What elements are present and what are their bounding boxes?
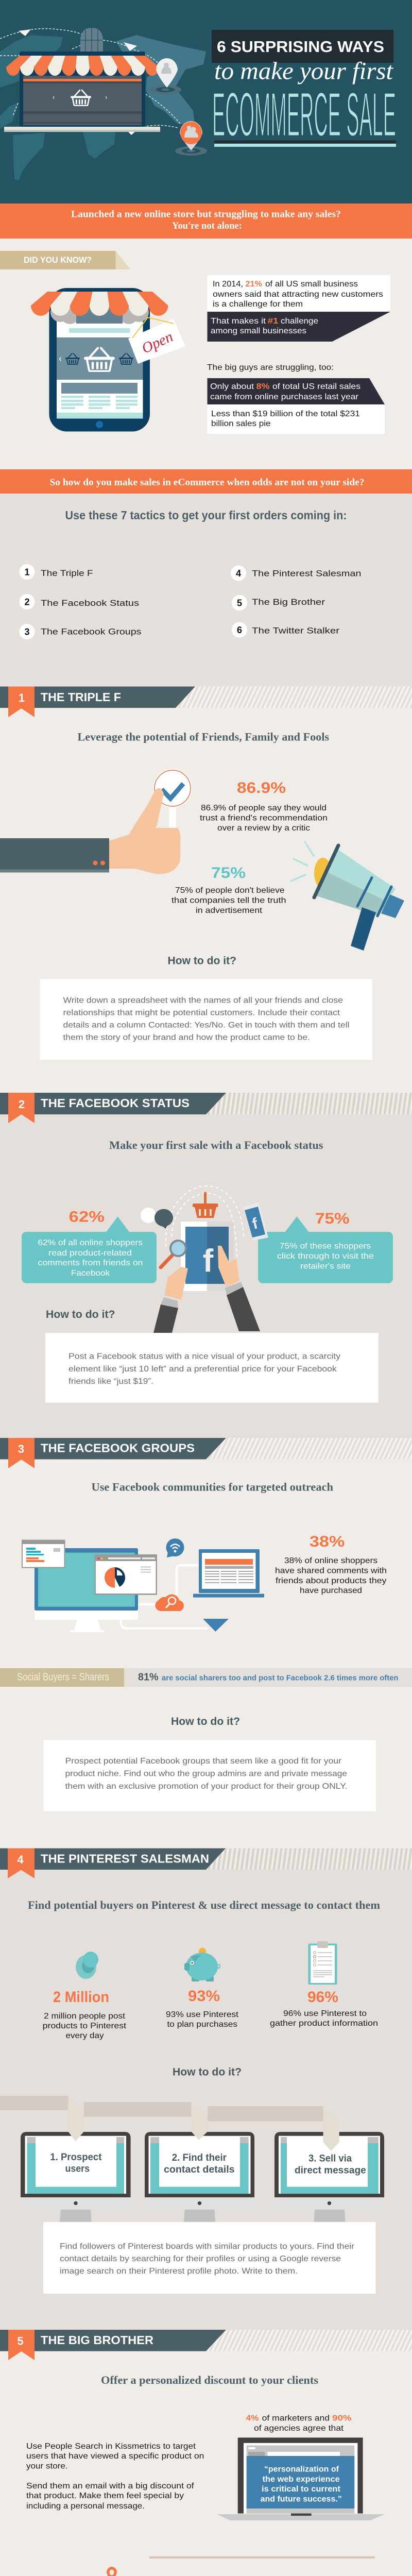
section banner 1 <box>0 686 412 717</box>
monitor step 3: 3. Sell via <box>308 2154 352 2164</box>
stat: 38%: have shared comments with <box>275 1567 387 1575</box>
stat: 38%: friends about products they <box>276 1577 386 1585</box>
how to do it heading 3: How to do it? <box>171 1716 240 1727</box>
open sign <box>128 317 185 364</box>
laptop quote: “personalization of <box>264 2465 339 2474</box>
section banner 2: 2 <box>19 1098 25 1111</box>
facebook tablet illustration <box>141 1186 268 1333</box>
intro banner: Launched a new online store but struggling to make any sales? <box>71 209 341 219</box>
stat panel: big guys struggling: 8% <box>256 382 270 391</box>
how to panel 3: them with an exclusive promotion of your product for their group ONLY. <box>65 1782 347 1791</box>
question banner: So how do you make sales in eCommerce when odds are not on your side? <box>49 477 365 488</box>
how to panel 1: them the story of your brand and how the product came to be. <box>63 1033 310 1042</box>
section banner 4: 4 <box>17 1853 24 1866</box>
social buyers band: are social sharers too and post to Facebook 2.6 times more often <box>162 1673 399 1682</box>
monitor step 2: contact details <box>164 2164 235 2175</box>
stat: marketers and agencies: 4% <box>246 2414 259 2423</box>
stat: 96%: 96% <box>307 1989 338 2006</box>
tactics list: The Triple F <box>41 568 93 578</box>
tactics heading: Use these 7 tactics to get your first orders coming in: <box>65 509 347 522</box>
heading: triple f: Leverage the potential of Friends, Family and Fools <box>77 731 329 743</box>
stat panel: big guys struggling: Only about <box>210 382 254 391</box>
callout: 75%: 75% <box>315 1210 350 1227</box>
stat: 2 million: 2 Million <box>53 1989 109 2006</box>
monitor step 2 <box>145 2132 254 2222</box>
tactics list: The Twitter Stalker <box>252 626 339 636</box>
stat: 2 million: every day <box>66 2031 104 2040</box>
icon: clipboard <box>308 1941 337 1985</box>
stat: marketers and agencies: 90% <box>332 2414 352 2423</box>
how to do it heading 4: How to do it? <box>173 2066 242 2078</box>
how to do it heading 2: How to do it? <box>46 1309 115 1320</box>
how to panel 1 <box>40 979 372 1060</box>
how to panel 2: friends like “just $19”. <box>68 1377 153 1386</box>
stat: 93%: to plan purchases <box>167 2020 237 2029</box>
tactics list: 1 <box>24 567 30 577</box>
stat: 75%: 75% <box>211 865 246 882</box>
stat: 75%: in advertisement <box>196 906 263 915</box>
big brother text <box>26 2442 204 2511</box>
laptop quote: is critical to current <box>262 2485 341 2494</box>
stat panel: big guys struggling: The big guys are struggling, too: <box>207 363 334 372</box>
tactics list: 5 <box>237 598 242 608</box>
callout: 62%: read product-related <box>48 1249 132 1258</box>
callout: 62% <box>22 1208 157 1283</box>
section banner 2 <box>0 1093 412 1123</box>
hero illustration: laptop storefront: ‹ <box>53 93 55 101</box>
stat: 38%: 38% <box>310 1533 345 1550</box>
how to panel 3: product niche. Find out who the group admins are and private message <box>65 1769 347 1778</box>
how to panel 3 <box>44 1740 376 1811</box>
stat: 2 million <box>43 1989 127 2040</box>
callout: 75%: retailer's site <box>300 1262 351 1270</box>
hero illustration: world map <box>0 35 206 180</box>
hero illustration: cage dome <box>80 28 103 52</box>
callout: 62%: 62% <box>69 1208 105 1225</box>
how to panel 2 <box>45 1333 379 1402</box>
section banner 2: THE FACEBOOK STATUS <box>41 1096 190 1110</box>
monitor step 2: 2. Find their <box>172 2153 227 2163</box>
stat panel: small business challenge: owners said that attracting new customers <box>213 290 383 299</box>
big brother text: including a personal message. <box>26 2502 145 2511</box>
callout: 62%: comments from friends on <box>38 1259 143 1267</box>
stat panel: big guys struggling: came from online purchases last year <box>210 393 359 401</box>
laptop quote: and future success.” <box>261 2495 342 2503</box>
stat: 86.9%: trust a friend's recommendation <box>200 814 328 822</box>
stat panel: small business challenge: is a challenge for them <box>213 300 303 309</box>
callout: 62%: 62% of all online shoppers <box>38 1239 143 1247</box>
social buyers band <box>0 1668 412 1687</box>
how to panel 2: Post a Facebook status with a nice visual of your product, a scarcity <box>68 1352 340 1361</box>
heading: pinterest: Find potential buyers on Pinterest & use direct message to contact them <box>28 1899 380 1911</box>
icon: piggy bank <box>184 1947 220 1981</box>
hero icon: orange location pin <box>175 121 207 156</box>
how to panel 4: Find followers of Pinterest boards with similar products to yours. Find their <box>60 2242 355 2251</box>
stat panel: small business challenge: In 2014, <box>213 280 243 289</box>
section banner 3 <box>0 1438 412 1468</box>
tactics list <box>20 564 362 639</box>
section banner 4 <box>0 1849 412 1878</box>
stat panel: small business challenge: challenge <box>281 317 318 326</box>
icon: hand holding check sign <box>0 769 192 874</box>
hero icon: white location pin <box>149 58 181 94</box>
section banner 5: THE BIG BROTHER <box>41 2333 153 2347</box>
section banner 3: THE FACEBOOK GROUPS <box>41 1442 195 1455</box>
stat: marketers and agencies <box>246 2414 352 2433</box>
stat panel: small business challenge: That makes it <box>211 317 266 326</box>
devices network illustration <box>22 1538 264 1632</box>
how to panel 3: Prospect potential Facebook groups that seem like a good fit for your <box>65 1757 342 1766</box>
social buyers band: 81% <box>138 1671 159 1683</box>
section banner 4: THE PINTEREST SALESMAN <box>41 1852 209 1866</box>
how to panel 4 <box>43 2222 376 2294</box>
monitor step 1: 1. Prospect <box>50 2152 102 2163</box>
tactics list: 6 <box>237 625 242 635</box>
big brother text: that product. Make them feel special by <box>26 2492 184 2500</box>
phone store illustration <box>31 288 168 432</box>
stat: marketers and agencies: of marketers and <box>262 2414 330 2423</box>
callout: 75%: click through to visit the <box>277 1252 374 1261</box>
stat: 38%: 38% of online shoppers <box>284 1556 377 1565</box>
how to panel 4: image search on their Pinterest profile photo. Write to them. <box>60 2267 298 2276</box>
tactics list: The Facebook Groups <box>41 626 141 637</box>
stat: 93%: 93% <box>188 1988 220 2005</box>
phone store illustration: ‹ <box>59 353 62 364</box>
section banner 5: 5 <box>17 2334 24 2347</box>
how to panel 4: contact details by searching for their profiles or using a Google reverse <box>60 2255 341 2263</box>
stat panel: small business challenge <box>207 275 390 342</box>
monitor step 3 <box>274 2132 384 2222</box>
stat: 75%: 75% of people don't believe <box>175 886 285 895</box>
hero illustration: laptop storefront <box>4 52 160 135</box>
heading: facebook status: Make your first sale with a Facebook status <box>109 1139 323 1151</box>
title: to make your first <box>214 58 394 85</box>
laptop quote: the web experience <box>263 2475 340 2484</box>
big brother text: users that have viewed a specific product on <box>26 2452 204 2461</box>
social buyers band: Social Buyers = Sharers <box>17 1671 109 1683</box>
tactics list: 4 <box>236 568 241 579</box>
did you know ribbon <box>0 251 131 269</box>
open sign: Open <box>139 328 176 357</box>
stat: 38% <box>275 1533 387 1595</box>
section banner 1: THE TRIPLE F <box>41 690 121 704</box>
stat: 96%: 96% use Pinterest to <box>283 2009 367 2018</box>
arrow ribbons <box>0 2096 339 2151</box>
stat panel: big guys struggling <box>207 363 385 434</box>
how to panel 1: details and a column Contacted: Yes/No. Get in touch with them and tell <box>63 1021 349 1030</box>
intro banner <box>71 209 341 231</box>
stat: 2 million: products to Pinterest <box>43 2022 127 2030</box>
stat panel: small business challenge: 21% <box>245 280 262 289</box>
tactics list: The Pinterest Salesman <box>252 569 362 578</box>
callout: 75% <box>258 1210 393 1283</box>
stat: 2 million: 2 million people post <box>44 2012 126 2021</box>
big brother text: your store. <box>26 2462 68 2470</box>
section banner 5 <box>0 2330 412 2360</box>
stat: 86.9% <box>200 779 328 833</box>
tactics list: The Facebook Status <box>41 598 139 608</box>
callout: 75%: 75% of these shoppers <box>280 1242 371 1251</box>
monitor step 1 <box>21 2132 131 2222</box>
stat panel: big guys struggling: billion sales pie <box>211 419 271 428</box>
heading: big brother: Offer a personalized discount to your clients <box>101 2374 318 2386</box>
stat panel: small business challenge: of all US small business <box>265 280 358 289</box>
title <box>212 30 396 149</box>
stat: 75%: that companies tell the truth <box>171 896 286 905</box>
stat: marketers and agencies: of agencies agree that <box>254 2424 344 2433</box>
facebook tablet illustration: f <box>250 1215 260 1233</box>
monitor step 1: users <box>65 2164 90 2175</box>
hero illustration: flight paths and paper planes <box>0 28 180 128</box>
stat: 75% <box>171 865 286 915</box>
stat panel: small business challenge: #1 <box>268 317 279 326</box>
stat panel: small business challenge: among small businesses <box>211 327 306 335</box>
section banner 3: 3 <box>18 1443 24 1455</box>
stat: 86.9%: 86.9% <box>237 779 286 796</box>
intro banner: You're not alone: <box>172 221 242 231</box>
how to panel 1: Write down a spreadsheet with the names of all your friends and close <box>63 996 343 1005</box>
stat panel: big guys struggling: of total US retail sales <box>272 382 360 391</box>
stat: 86.9%: over a review by a critic <box>217 824 310 833</box>
icon: teal coin blob <box>76 1952 98 1979</box>
monitor step 3: direct message <box>295 2165 366 2176</box>
hero illustration: laptop storefront: › <box>105 93 107 101</box>
tactics list: The Big Brother <box>252 597 325 607</box>
facebook tablet illustration: f <box>203 1243 214 1279</box>
tactics list: 3 <box>24 626 30 637</box>
big brother text: Send them an email with a big discount of <box>26 2482 194 2490</box>
big brother text: Use People Search in Kissmetrics to target <box>26 2442 196 2451</box>
how to do it heading 1: How to do it? <box>168 955 236 967</box>
callout: 62%: Facebook <box>71 1269 110 1278</box>
email illustration <box>7 2567 126 2576</box>
stat: 93% <box>166 1988 239 2029</box>
stat: 38%: have purchased <box>300 1586 362 1595</box>
icon: megaphone <box>291 842 404 951</box>
how to panel 1: relationships that might be potential customers. Include their contact <box>63 1008 340 1017</box>
stat: 93%: 93% use Pinterest <box>166 2010 239 2019</box>
did you know ribbon: DID YOU KNOW? <box>24 255 92 265</box>
stat: 96% <box>270 1989 378 2028</box>
stat: 86.9%: 86.9% of people say they would <box>201 804 327 812</box>
title: 6 SURPRISING WAYS <box>217 38 384 56</box>
heading: facebook groups: Use Facebook communities for targeted outreach <box>92 1481 333 1494</box>
tactics list: 2 <box>24 597 30 607</box>
divider <box>149 2556 375 2558</box>
laptop quote <box>217 2437 385 2520</box>
section banner 1: 1 <box>19 691 25 704</box>
stat panel: big guys struggling: Less than $19 billion of the total $231 <box>211 410 360 418</box>
how to panel 2: element like “just 10 left” and a preferential price for your Facebook <box>68 1365 337 1374</box>
stat: 96%: gather product information <box>270 2019 378 2028</box>
